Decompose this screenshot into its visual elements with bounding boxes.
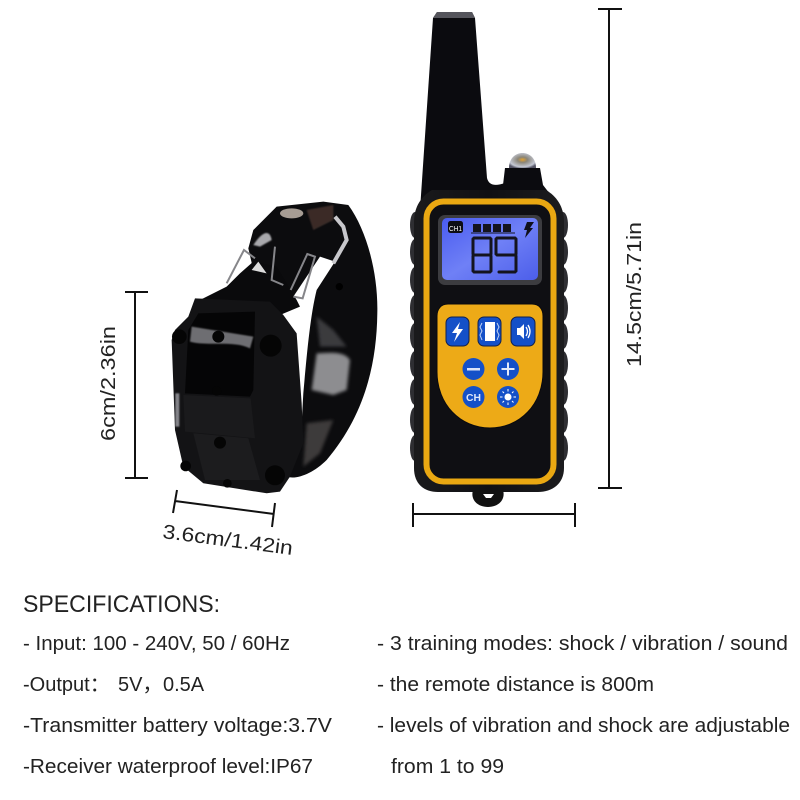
yellow border xyxy=(426,202,554,482)
specifications right column xyxy=(377,633,790,778)
receiver body xyxy=(172,298,303,493)
collar strap xyxy=(248,202,377,477)
lower band xyxy=(193,433,260,480)
band slider xyxy=(183,395,255,438)
glossy centre band xyxy=(185,312,255,397)
CH button: CH xyxy=(466,392,481,404)
LED dome xyxy=(509,153,536,168)
strap highlights xyxy=(252,205,350,467)
label: collar height: 6cm/2.36in xyxy=(98,326,120,441)
LED nub xyxy=(490,168,553,198)
training modes: - 3 training modes: shock / vibration / sound xyxy=(377,633,788,655)
plus button xyxy=(497,358,519,380)
output spec: 5V， xyxy=(118,674,162,696)
band holes and screws xyxy=(172,329,285,488)
dimension: remote width xyxy=(413,503,575,527)
side grip bumps xyxy=(410,212,568,461)
LCD screen xyxy=(442,218,538,280)
adjustable levels: - levels of vibration and shock are adjustable xyxy=(377,715,790,737)
battery spec: -Transmitter battery voltage:3.7V xyxy=(23,715,333,737)
dimension: collar width xyxy=(161,490,294,560)
collar receiver xyxy=(172,202,377,493)
remote transmitter xyxy=(410,12,568,507)
antenna xyxy=(420,12,505,210)
LCD bezel xyxy=(438,215,542,285)
digits 89 xyxy=(473,238,516,272)
left edge glare xyxy=(175,393,179,427)
rivet xyxy=(280,208,303,218)
light button xyxy=(497,386,519,408)
waterproof spec: -Receiver waterproof level:IP67 xyxy=(23,756,313,778)
remote body xyxy=(414,190,564,492)
dimension: remote height xyxy=(598,9,646,488)
metal buckle xyxy=(227,217,347,298)
output spec: 0.5A xyxy=(163,674,205,696)
CH1 badge: CH1 xyxy=(449,224,462,233)
antenna tip xyxy=(433,12,475,18)
output spec: -Output： xyxy=(23,674,110,696)
shock button xyxy=(446,317,469,346)
lightning indicator xyxy=(524,222,534,238)
vibration button xyxy=(478,317,501,346)
band highlights xyxy=(190,327,253,348)
label: remote height: 14.5cm/5.71in xyxy=(624,222,646,367)
sound button xyxy=(511,317,535,346)
specifications heading: SPECIFICATIONS: xyxy=(23,591,220,618)
CH button xyxy=(462,386,484,408)
remote distance: - the remote distance is 800m xyxy=(377,674,654,696)
hanging loop xyxy=(472,490,504,507)
battery indicator xyxy=(471,224,515,234)
input spec: - Input: 100 - 240V, 50 / 60Hz xyxy=(23,633,290,655)
level range: from 1 to 99 xyxy=(391,756,504,778)
connector strap xyxy=(200,262,300,315)
specifications left column xyxy=(23,633,333,778)
yellow keypad xyxy=(437,304,543,428)
dimension: collar height xyxy=(98,292,148,478)
label: collar width: 3.6cm/1.42in xyxy=(161,521,294,560)
minus button xyxy=(462,358,484,380)
